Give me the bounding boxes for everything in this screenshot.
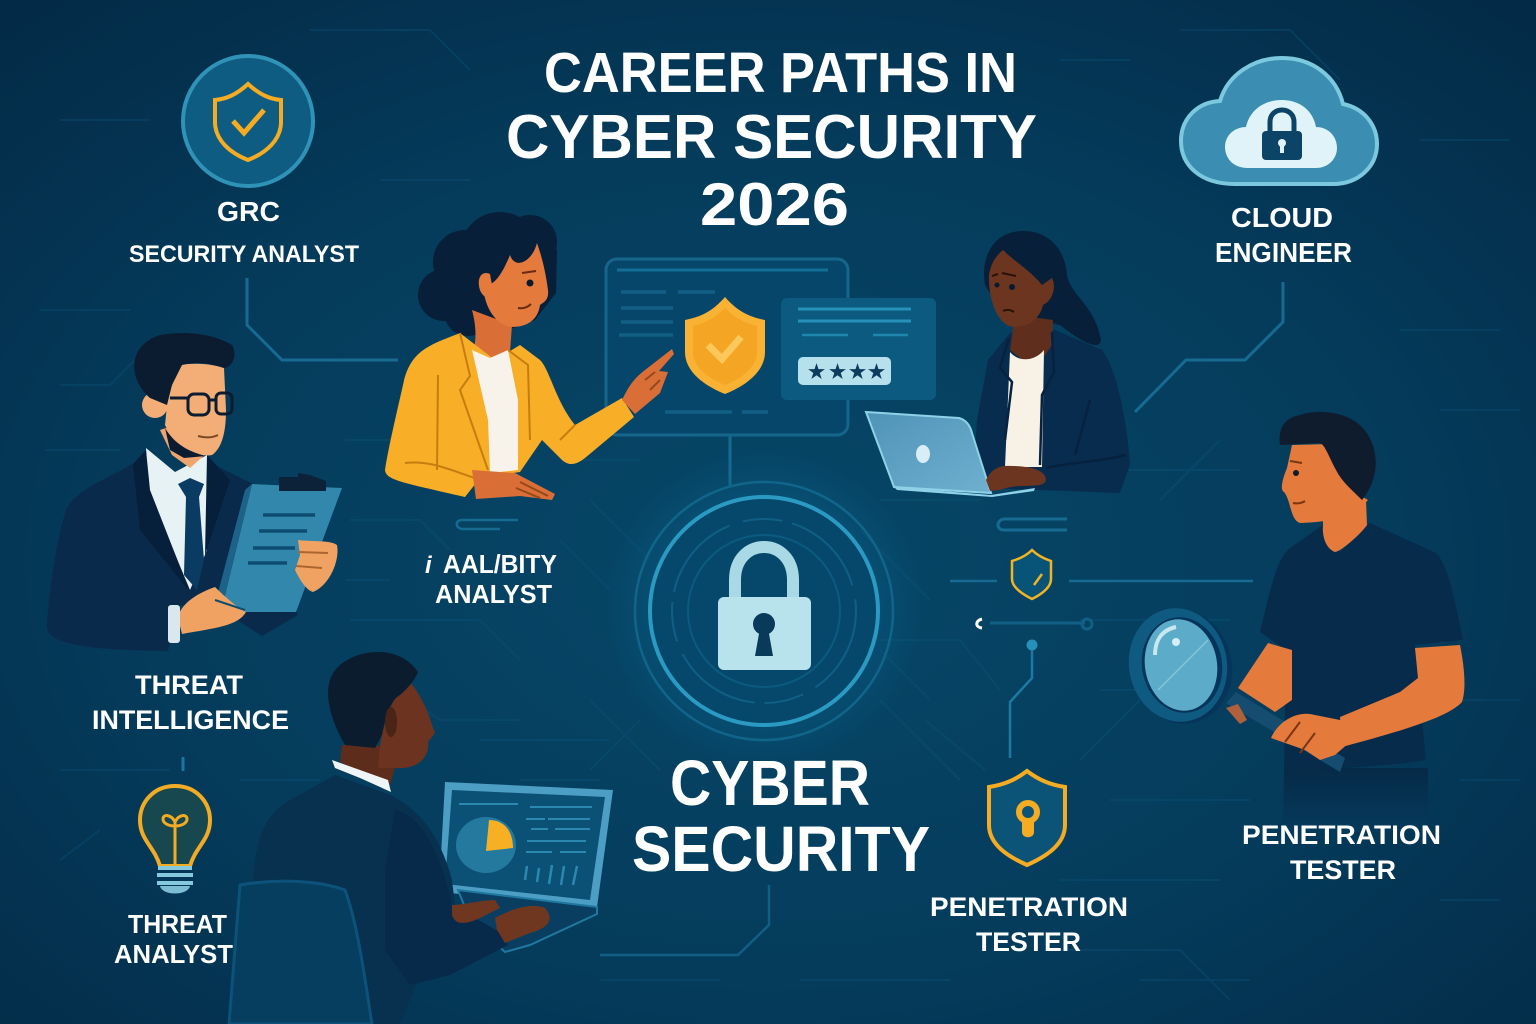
heading: cyber security [632, 747, 930, 885]
padlock [718, 547, 811, 670]
label: threat analyst: THREAT [128, 909, 227, 939]
label: cloud engineer [1215, 202, 1352, 268]
panel: login card [781, 298, 936, 400]
title: CAREER PATHS IN [544, 41, 1017, 105]
label: threat intelligence: INTELLIGENCE [92, 705, 289, 735]
label: threat intelligence: THREAT [135, 670, 243, 700]
password field: ★ [829, 362, 846, 383]
label: GRC: GRC [217, 196, 280, 227]
hair [418, 212, 557, 336]
password field [798, 357, 891, 385]
connector lines from small shield [950, 580, 1253, 582]
label: threat analyst: ANALYST [114, 939, 233, 969]
figure: man with clipboard [47, 333, 342, 651]
label: penetration tester right: TESTER [1290, 855, 1396, 885]
label: cloud engineer: CLOUD [1231, 202, 1333, 233]
password field: ★ [868, 362, 885, 383]
icon: GRC shield badge [183, 56, 313, 186]
icon: key shield [989, 771, 1065, 865]
connector stub to bulb [182, 757, 184, 771]
label: GRC [129, 196, 359, 268]
torso [230, 775, 505, 1024]
title: 2026 [700, 171, 849, 238]
connector: cyber security bottom [600, 885, 769, 955]
label: AAL/BITY analyst [425, 549, 557, 609]
connector clip under laptop [998, 519, 1067, 530]
label: penetration tester middle: PENETRATION [930, 892, 1128, 922]
label: AAL/BITY analyst: AAL/BITY [443, 549, 557, 579]
label: AAL/BITY analyst: ANALYST [435, 579, 552, 609]
icon: cloud with lock [1181, 58, 1377, 184]
magnifier [1120, 600, 1345, 772]
label: penetration tester middle: TESTER [976, 927, 1081, 957]
password field: ★ [808, 362, 825, 383]
label: threat analyst [114, 909, 233, 969]
connector: GRC to centre figure [247, 278, 398, 360]
clipboard [214, 473, 342, 612]
figure: man with magnifier [1120, 412, 1464, 832]
connector to key shield [1010, 640, 1038, 758]
label: penetration tester right [1242, 820, 1441, 885]
label: threat intelligence [92, 670, 289, 735]
heading: cyber security: CYBER [670, 747, 870, 819]
figure: woman with laptop [866, 231, 1130, 497]
laptop [439, 782, 613, 952]
title [506, 41, 1037, 238]
label: penetration tester middle [930, 892, 1128, 957]
figure: woman in yellow jacket [385, 212, 674, 500]
clip line under woman [457, 520, 518, 529]
connector: monitor to lock [728, 436, 732, 486]
label: cloud engineer: ENGINEER [1215, 237, 1352, 268]
central lock emblem [604, 451, 924, 771]
label: AAL/BITY analyst: i [425, 552, 433, 579]
label: GRC: SECURITY ANALYST [129, 241, 359, 268]
heading: cyber security: SECURITY [632, 813, 930, 885]
connector: cloud engineer [1135, 282, 1283, 412]
panel: monitor screen [606, 259, 848, 435]
icon: small shield [1012, 550, 1051, 599]
label: penetration tester right: PENETRATION [1242, 820, 1441, 850]
icon: gold shield [685, 297, 765, 394]
chair [229, 881, 372, 1024]
title: CYBER SECURITY [506, 103, 1037, 172]
icon: light bulb [140, 786, 210, 894]
password field: ★ [849, 362, 866, 383]
small circuit clip [977, 619, 1092, 629]
figure: man at laptop [229, 652, 613, 1024]
